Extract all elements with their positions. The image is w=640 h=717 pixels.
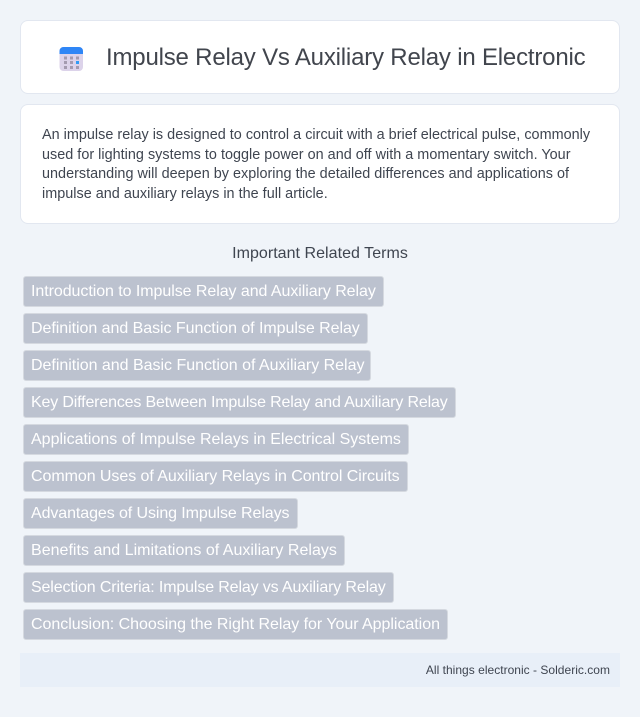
tag 4: Key Differences Between Impulse Relay and Auxiliary Relay [31,394,448,411]
tag 3 [23,350,371,381]
title: Impulse Relay Vs Auxiliary Relay in Electronic [106,44,585,71]
tag 6 [23,461,408,492]
tag 1: Introduction to Impulse Relay and Auxiliary Relay [31,283,376,300]
text block: intro: used for lighting systems to toggle power on and off with a momentary switch. Your [42,147,571,163]
tag 1 [23,276,384,307]
tag 8: Benefits and Limitations of Auxiliary Relays [31,542,337,559]
text block: intro: An impulse relay is designed to control a circuit with a brief electrical pulse, commonly [42,127,590,143]
icon: calendar [60,47,83,71]
tag 6: Common Uses of Auxiliary Relays in Control Circuits [31,468,400,485]
footer credit: All things electronic - Solderic.com [426,663,610,677]
heading: related terms: Important Related Terms [232,245,408,262]
panel: intro text [20,104,620,224]
tag 10 [23,609,448,640]
tag 9 [23,572,394,603]
tag 7: Advantages of Using Impulse Relays [31,505,289,522]
tag 9: Selection Criteria: Impulse Relay vs Auxiliary Relay [31,579,386,596]
text block: intro: impulse and auxiliary relays in the full article. [42,186,328,202]
tag 5: Applications of Impulse Relays in Electrical Systems [31,431,401,448]
tag 8 [23,535,345,566]
tag 2 [23,313,368,344]
text block: intro [42,127,590,202]
panel: title card [20,20,620,94]
tag 3: Definition and Basic Function of Auxiliary Relay [31,357,364,374]
tag 4 [23,387,456,418]
footer [20,653,620,687]
tag 7 [23,498,298,529]
tag 2: Definition and Basic Function of Impulse Relay [31,320,360,337]
text block: intro: understanding will deepen by exploring the detailed differences and applications of [42,166,569,182]
tag 10: Conclusion: Choosing the Right Relay for Your Application [31,616,440,633]
tag 5 [23,424,409,455]
list: related terms [23,276,456,640]
